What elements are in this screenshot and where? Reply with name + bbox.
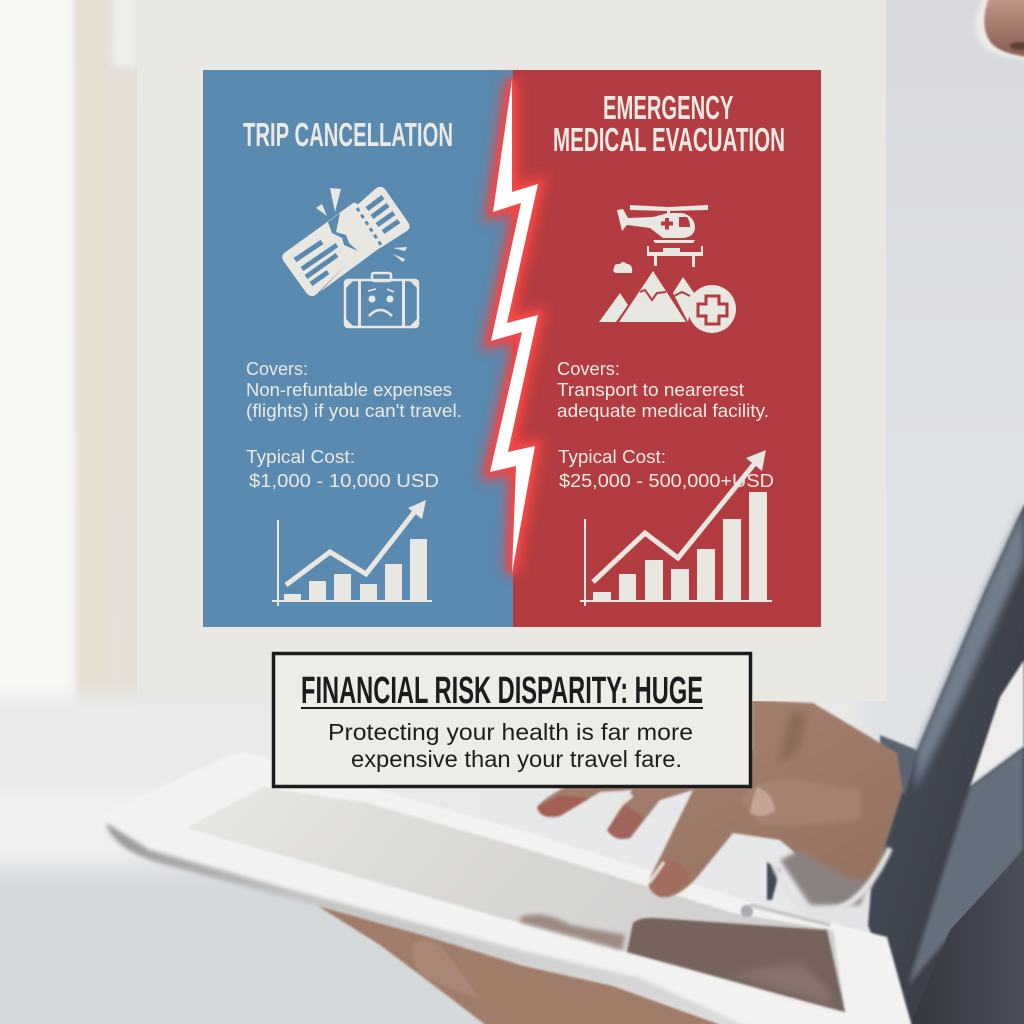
text: trip typical cost: $1,000 - 10,000 USD — [249, 471, 439, 491]
lightning bolt divider — [490, 80, 538, 573]
callout heading: FINANCIAL RISK DISPARITY: HUGE — [301, 670, 703, 712]
icon: helicopter cross — [661, 217, 690, 230]
callout box — [274, 654, 750, 786]
photo: tablet — [106, 752, 913, 1024]
paper sheet — [137, 0, 886, 701]
text: evacuation coverage: adequate medical facility. — [557, 401, 769, 421]
text: evacuation coverage: Transport to nearerest — [557, 380, 744, 400]
icon: mountains and medical cross — [599, 262, 736, 333]
text: evacuation typical cost: Typical Cost: — [558, 447, 666, 467]
photo: nose of the man — [975, 0, 1024, 62]
text: trip coverage: Covers: — [246, 359, 308, 379]
callout text: Protecting your health is far more — [328, 719, 693, 745]
panel: trip cancellation — [203, 70, 513, 627]
heading: emergency medical evacuation: MEDICAL EVACUATION — [553, 121, 785, 158]
photo: lower hand holding tablet — [318, 906, 735, 1024]
icon: torn ticket — [283, 187, 409, 296]
photo: upper hand touching tablet — [537, 700, 903, 912]
text: evacuation coverage: Covers: — [557, 359, 620, 379]
text: trip coverage: Non-refuntable expenses — [246, 380, 452, 400]
photo: businessman suit — [767, 505, 1024, 1024]
heading: emergency medical evacuation: EMERGENCY — [603, 89, 733, 126]
text: trip typical cost: Typical Cost: — [246, 447, 355, 467]
photo: hand reflected on screen — [627, 918, 845, 1012]
panel: emergency medical evacuation — [513, 70, 821, 627]
chart: evacuation cost bars — [580, 450, 772, 606]
icon: rescue helicopter — [617, 205, 708, 267]
callout text: expensive than your travel fare. — [351, 746, 682, 772]
chart: trip cost bars — [272, 500, 432, 606]
icon: sad suitcase — [345, 273, 418, 327]
heading: trip cancellation: TRIP CANCELLATION — [243, 116, 453, 153]
text: evacuation typical cost: $25,000 - 500,000+USD — [559, 471, 774, 491]
text: trip coverage: (flights) if you can't travel. — [246, 401, 462, 421]
